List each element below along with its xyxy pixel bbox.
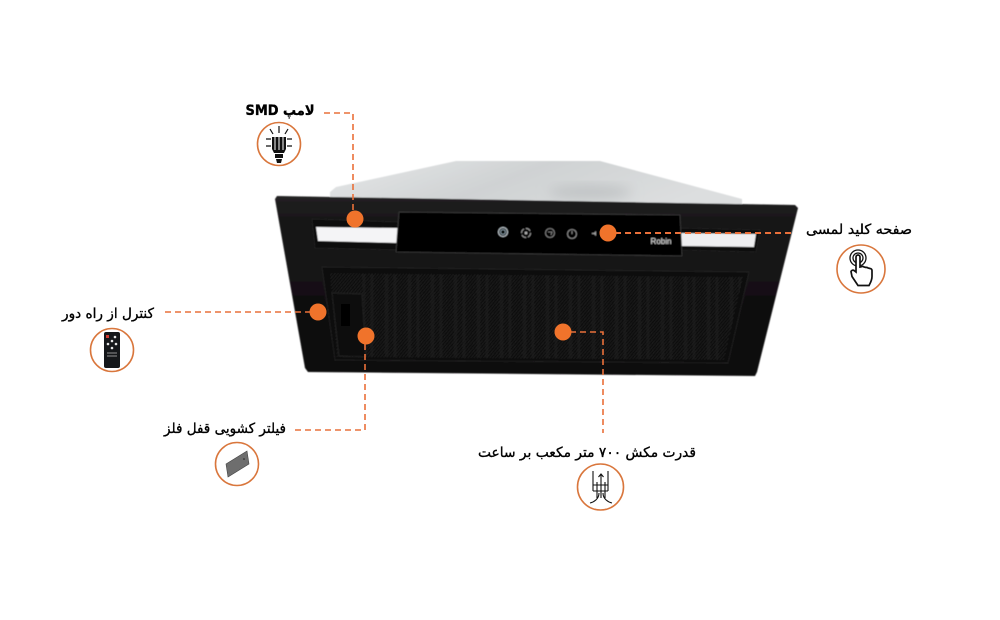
remote marker dot xyxy=(310,304,326,320)
filter latch xyxy=(332,293,366,357)
icon: touch hand xyxy=(837,245,885,293)
grease filter xyxy=(322,267,749,363)
filter mesh xyxy=(330,273,743,360)
icon: suction xyxy=(578,464,624,510)
mesh streaks xyxy=(362,274,743,360)
filter leader line xyxy=(293,344,365,430)
icon: filter plate xyxy=(216,442,258,486)
icon: lamp xyxy=(258,122,300,166)
touch leader line xyxy=(615,232,795,234)
filter marker dot xyxy=(358,328,374,344)
touch icon: lamp xyxy=(498,228,508,236)
SMD leader line xyxy=(324,113,353,212)
touch marker dot xyxy=(600,224,616,242)
touch icon: sound xyxy=(592,231,596,236)
suction leader line xyxy=(570,332,603,433)
callout: remote control xyxy=(61,304,327,372)
touch icon: power xyxy=(568,230,576,238)
hood black front frame xyxy=(275,196,798,376)
left white lamp xyxy=(316,227,398,243)
callout: filter xyxy=(163,328,374,486)
touch icon: fan xyxy=(522,228,530,238)
suction marker dot xyxy=(554,324,572,340)
hood silver top casing xyxy=(330,161,742,208)
suction label: قدرت مکش ۷۰۰ متر مکعب بر ساعت xyxy=(478,445,696,461)
latch slot xyxy=(341,304,350,326)
SMD label: لامپ SMD xyxy=(246,103,314,119)
touch label: صفحه کلید لمسی xyxy=(806,222,912,238)
filter label: فیلتر کشویی قفل فلز xyxy=(163,421,286,437)
casing blotches xyxy=(548,185,632,199)
touch icon: timer xyxy=(546,228,554,238)
icon: remote xyxy=(90,328,134,372)
remote label: کنترل از راه دور xyxy=(61,306,154,322)
callout: touch panel xyxy=(600,222,912,293)
right lamp recess xyxy=(680,228,760,252)
range hood product image xyxy=(275,161,798,376)
callout: SMD lamp xyxy=(246,103,364,228)
brand name: Robin xyxy=(651,237,671,246)
SMD marker dot xyxy=(346,210,364,228)
left lamp recess xyxy=(312,219,398,250)
right white lamp xyxy=(680,233,756,247)
remote leader line xyxy=(165,311,310,313)
callout: suction power xyxy=(478,324,696,510)
touch control panel xyxy=(396,212,682,256)
